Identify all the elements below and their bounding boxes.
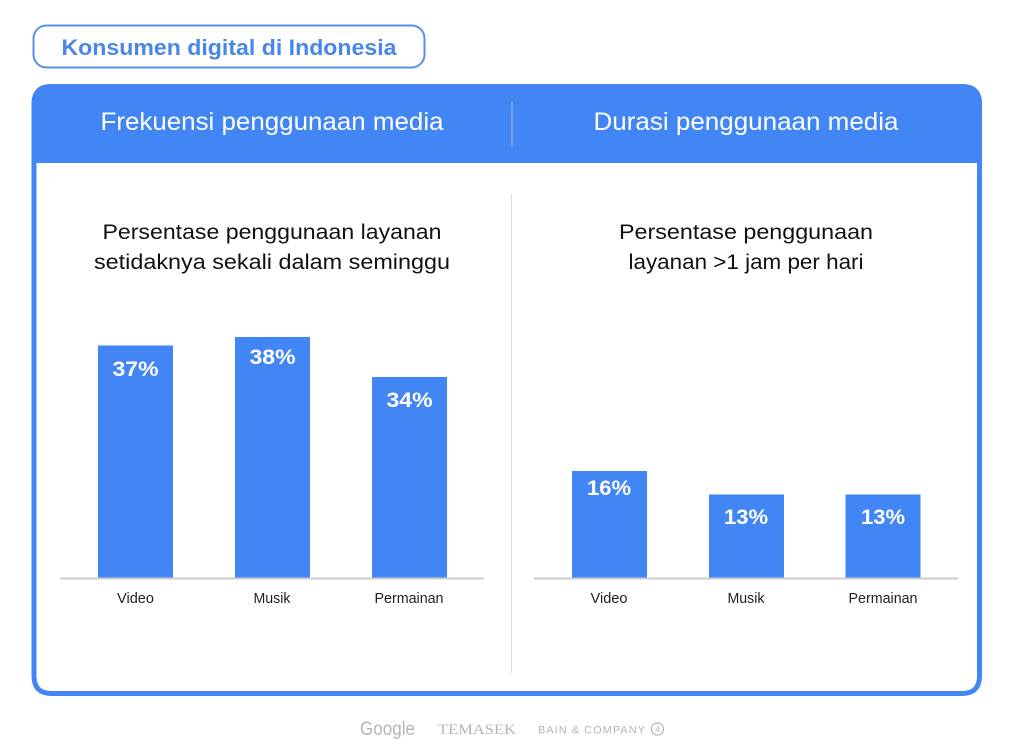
bar: Musik 38%: Musik xyxy=(254,591,291,607)
subtitle: duration chart xyxy=(619,221,873,274)
bar: Permainan 34%: 34% xyxy=(386,389,433,412)
bar chart: frequency xyxy=(60,337,484,607)
icon: Bain circle: 4 xyxy=(655,725,660,734)
bar: Musik 38% xyxy=(235,337,310,607)
subtitle: duration chart: Persentase penggunaan xyxy=(619,221,873,244)
footer logos xyxy=(360,719,664,740)
bar: Video 37%: 37% xyxy=(112,358,159,381)
title: Konsumen digital di Indonesia xyxy=(62,35,397,60)
subtitle: duration chart: layanan >1 jam per hari xyxy=(628,251,864,274)
bar: Musik 13%: Musik xyxy=(728,591,765,607)
bar: Video 37%: Video xyxy=(117,591,154,607)
bar: Permainan 13% xyxy=(846,494,920,607)
bar: Musik 38%: 38% xyxy=(250,346,296,369)
bar chart: duration xyxy=(534,471,958,607)
subtitle: frequency chart xyxy=(94,221,450,274)
heading: Frekuensi penggunaan media: Frekuensi penggunaan media xyxy=(100,108,444,136)
bar: Video 37% xyxy=(98,346,173,607)
bar: Permainan 34%: Permainan xyxy=(374,591,444,607)
icon: Bain circle xyxy=(652,723,664,735)
subtitle: frequency chart: Persentase penggunaan layanan xyxy=(102,221,442,244)
heading: Durasi penggunaan media: Durasi penggunaan media xyxy=(594,108,899,136)
bar: Permainan 13%: Permainan xyxy=(848,591,918,607)
bar: Video 16%: 16% xyxy=(587,477,631,500)
logo: Google: Google xyxy=(360,719,415,740)
panel header band xyxy=(32,84,982,163)
panel: main card xyxy=(32,84,982,694)
logo: Bain & Company: BAIN & COMPANY xyxy=(538,724,646,736)
bar: Video 16% xyxy=(572,471,647,607)
bar: Musik 13% xyxy=(709,494,784,607)
title xyxy=(34,26,424,68)
bar: Video 16%: Video xyxy=(590,591,628,607)
bar: Permainan 34% xyxy=(372,377,447,607)
logo: Temasek: TEMASEK xyxy=(438,722,517,738)
bar: Musik 13%: 13% xyxy=(724,506,768,529)
subtitle: frequency chart: setidaknya sekali dalam seminggu xyxy=(94,251,450,274)
bar: Permainan 13%: 13% xyxy=(861,506,905,529)
